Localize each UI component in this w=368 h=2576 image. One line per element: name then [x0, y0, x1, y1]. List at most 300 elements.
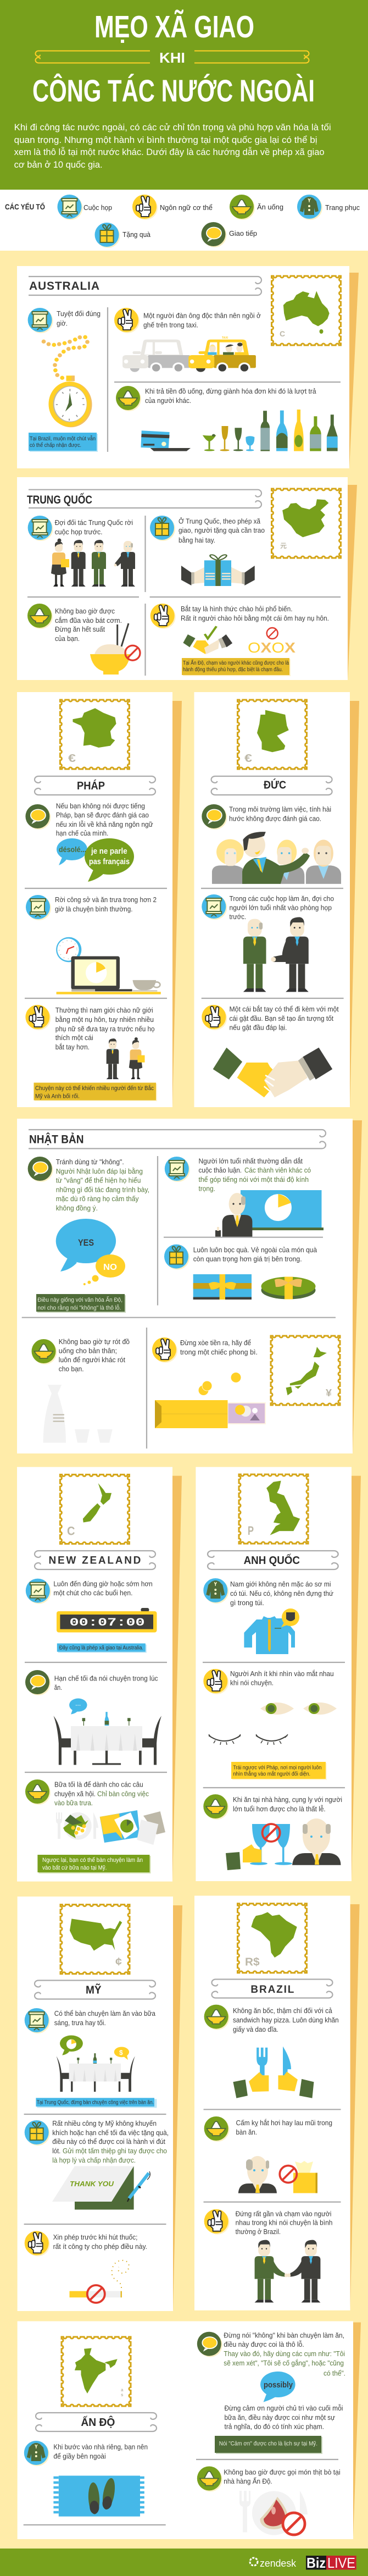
heading: Australia: [29, 277, 261, 295]
illustration: thank-you card and pen: THANK YOU: [70, 2180, 114, 2188]
legend label: communication: Giao tiếp: [229, 229, 257, 237]
tip text: Thường thì nam giới chào nữ giới: [55, 1007, 153, 1014]
illustration: YES and NO bubbles: [56, 1219, 125, 1285]
heading: India: [36, 2413, 157, 2431]
tip text: rất ít công ty cho phép điều này.: [53, 2243, 147, 2251]
illustration: wrapped gifts: [193, 1274, 315, 1300]
logo: BizLIVE: LIVE: [327, 2555, 355, 2571]
illustration: possibly bubble: [260, 2372, 295, 2402]
title line 1: MẸO XÃ GIAO: [94, 9, 254, 45]
tip text: [233, 1796, 342, 1813]
stamp: Australia map: [271, 276, 341, 345]
tip: gifts and cards: [25, 2120, 169, 2210]
tip: eye contact: [203, 1669, 337, 1780]
logo: BizLIVE: [306, 2555, 356, 2571]
tip text: người lớn tuổi nhất vào phòng họp: [230, 904, 332, 912]
tip text: Khi bước vào nhà riêng, bạn nên: [53, 2444, 148, 2451]
illustration: hands with fork and knife: [233, 2047, 314, 2098]
tip: pouring drinks: [32, 1338, 130, 1442]
illustration: cigarette: [69, 2260, 129, 2303]
icon: clothing: [297, 195, 322, 220]
tip: greeting: [150, 604, 329, 676]
legend label: gift: Tặng quà: [122, 230, 151, 239]
heading: New Zealand: NEW ZEALAND: [48, 1555, 141, 1567]
callout: North America note: Chuyện này có thể khiến nhiều người đến từ Bắc: [35, 1085, 154, 1092]
panel: France: [17, 692, 182, 1107]
tip text: thường ở Brazil.: [236, 2228, 281, 2236]
tip: wrap gifts: [164, 1245, 317, 1300]
tip text: thích một cái: [55, 1034, 93, 1042]
tip text: [56, 802, 153, 837]
tip: wait for partners: [28, 516, 135, 587]
tip text: giao, người tặng quà cần trao: [179, 527, 265, 534]
tip text: Gửi một tấm thiệp ghi tay được cho: [63, 2147, 167, 2155]
heading: Japan: [29, 1130, 326, 1148]
tip text: Không bao giờ tự rót đồ: [59, 1338, 130, 1346]
tip text: phụ nữ sẽ đưa tay ra trước nếu họ: [55, 1025, 155, 1033]
tip text: Đợi đối tác Trung Quốc rời: [55, 519, 133, 527]
footer: [0, 2549, 368, 2576]
tip text: [145, 388, 316, 405]
tip text: Hạn chế tối đa nói chuyện trong lúc: [54, 1674, 158, 1682]
tip text: Khi ăn tại nhà hàng, cụng ly với người: [233, 1796, 342, 1804]
tip text: [54, 1674, 158, 1691]
tip: long lunches: [26, 895, 161, 994]
stamp: India map: [62, 2337, 131, 2406]
legend label: meeting: Cuộc họp: [83, 203, 112, 212]
illustration: gray car and taxi: [122, 340, 256, 372]
tip text: [199, 1157, 311, 1193]
tip text: Một người đàn ông độc thân nên ngồi ở: [143, 312, 261, 320]
tip text: từ "vâng" để thể hiện họ hiểu: [56, 1176, 141, 1184]
tip text: Luôn đến đúng giờ hoặc sớm hơn: [53, 1580, 153, 1588]
tip text: Đừng ăn hết suất: [55, 626, 105, 633]
tip text: Tuyệt đối đúng: [57, 310, 101, 318]
illustration: older man and tissue box: [238, 2156, 317, 2193]
tip: dinner is for social talk: [25, 1779, 165, 1873]
illustration: digital timer: [57, 1608, 157, 1633]
stamp: France map: [60, 700, 129, 769]
tip text: giấy và dao dĩa.: [233, 2026, 278, 2033]
illustration: clock, laptop and coffee: [56, 937, 161, 994]
callout: USA thank-you note: Nói "Cảm ơn" được cho là lịch sự tại Mỹ.: [219, 2441, 317, 2447]
tip: taxi seating: [114, 308, 261, 372]
illustration: bowl with chopsticks: [90, 623, 140, 675]
panel: Germany: [194, 692, 359, 1107]
tip: ask before smoking: [25, 2231, 147, 2303]
tip text: Cấm kỵ hắt hơi hay lau mũi trong: [236, 2119, 332, 2127]
callout: Australia note: [57, 1644, 147, 1652]
tip text: chuyện xã hội.: [54, 1790, 96, 1798]
tip: eldest leads discussion: [165, 1157, 324, 1237]
tip text: [230, 1005, 339, 1031]
illustration: two men shaking hands: [255, 2240, 320, 2303]
panel: New Zealand: [17, 1467, 182, 1882]
tip text: ghế trên trong taxi.: [143, 322, 198, 329]
stamp: Japan map: ¥: [326, 1387, 332, 1398]
callout: China note: [36, 2098, 157, 2108]
tip: be on time: [26, 1579, 157, 1652]
tip text: bằng hai tay.: [179, 536, 215, 544]
icon: communication: [201, 222, 226, 247]
tip text: [57, 310, 101, 328]
heading: Brazil: [212, 1979, 333, 1998]
heading: USA: [35, 1980, 155, 1999]
panel: Brazil: [194, 1895, 360, 2310]
illustration: handshake and check: [183, 626, 232, 654]
tip text: Chỉ bàn công việc: [97, 1790, 149, 1798]
illustration: envelope, banknote and coins: [155, 1373, 265, 1428]
stamp: Brazil map: [237, 1904, 306, 1973]
tip text: [230, 895, 334, 921]
tip: shoes off: [24, 2441, 148, 2517]
callout: Brazil note: [29, 433, 98, 452]
tip text: [230, 1580, 333, 1607]
tip text: có thể".: [324, 2369, 345, 2377]
heading: USA: MỸ: [86, 1984, 102, 1997]
tip text: lớn tuổi hơn được cho là thất lễ.: [233, 1805, 326, 1813]
illustration: YES and NO bubbles: YES: [78, 1237, 94, 1248]
tip text: [54, 2010, 155, 2027]
panel: USA: [18, 1897, 182, 2311]
tip text: nếu gật đầu đáp lại.: [230, 1024, 287, 1031]
stamp: Germany map: [237, 700, 306, 769]
tip text: cái gật đầu. Bạn sẽ tạo ấn tượng tốt: [230, 1015, 333, 1022]
tip text: mặc dù rõ ràng họ cảm thấy: [56, 1195, 139, 1203]
tip text: [236, 2119, 332, 2136]
tip: chopsticks in rice: [27, 604, 140, 675]
illustration: French speech bubbles: pas français: [89, 857, 130, 866]
tip text: [53, 1580, 153, 1597]
tip text: [55, 896, 157, 913]
callout: USA thank-you note: [215, 2436, 322, 2454]
ornamental lines: [35, 51, 309, 63]
tip text: gì trong túi.: [230, 1599, 264, 1607]
callout: North America note: Mỹ và Anh bối rối.: [35, 1093, 80, 1100]
tip: paying for drinks: [116, 386, 338, 451]
tip text: có túi. Nếu có, không nên đựng thứ: [230, 1590, 333, 1597]
illustration: French speech bubbles: désolé...: [59, 845, 86, 854]
tip text: bắt tay hơn.: [55, 1043, 90, 1051]
tip text: hạn chế của mình.: [56, 830, 108, 837]
legend label: food: Ăn uống: [257, 203, 283, 211]
tip text: Tránh dùng từ "không".: [56, 1158, 124, 1166]
tip text: nhau trong khi nói chuyện là bình: [236, 2219, 333, 2226]
stamp: Brazil map: R$: [245, 1956, 260, 1969]
stamp: France map: €: [68, 753, 76, 765]
illustration: business dinner: [57, 2035, 135, 2092]
tip: limit dinner talk: [25, 1670, 161, 1765]
tip: eldest enters first: [202, 894, 334, 992]
stamp: UK map: [239, 1474, 308, 1544]
intro paragraph: xem là thô lỗ tại một nước khác. Dưới đây là các hướng dẫn về phép xã giao: [14, 147, 325, 157]
tip text: [59, 1338, 130, 1373]
tip text: Bắt tay là hình thức chào hỏi phổ biến.: [181, 605, 292, 613]
heading: India: ẤN ĐỘ: [81, 2415, 115, 2429]
tip text: [55, 1007, 155, 1051]
tip: no eating with hands: [204, 2005, 339, 2098]
legend label: body language: Ngôn ngữ cơ thể: [160, 203, 213, 212]
tip text: Người Nhật luôn đáp lại bằng: [56, 1167, 143, 1175]
panel: United Kingdom: [196, 1467, 361, 1881]
tip text: giờ là chuyện bình thường.: [55, 905, 133, 913]
tip text: [224, 2332, 345, 2377]
stamp: USA map: [60, 1905, 130, 1974]
panel: Australia: [17, 266, 359, 468]
tip text: Rất nhiều công ty Mỹ không khuyến: [52, 2120, 157, 2127]
heading: France: PHÁP: [77, 780, 105, 792]
illustration: steak on plate: [239, 2491, 308, 2536]
tip text: giờ.: [57, 320, 68, 328]
stamp: UK map: P: [248, 1524, 254, 1538]
callout: India no note: Điều này giống với văn hóa Ấn Độ,: [37, 1296, 122, 1303]
tip text: nếu xin lỗi về khả năng ngôn ngữ: [56, 820, 153, 828]
illustration: French speech bubbles: je ne parle: [91, 847, 127, 856]
stamp: USA map: ¢: [115, 1956, 122, 1968]
tip text: [179, 517, 265, 544]
icon: pocket watch: [42, 335, 92, 427]
tip text: sandwich hay pizza. Luôn dùng khăn: [233, 2016, 339, 2024]
illustration: man and woman: [107, 1037, 145, 1079]
callout: Brazil note: Tại Brazil, muộn một chút vẫn: [30, 435, 96, 442]
tip text: Một cái bắt tay có thể đi kèm với một: [230, 1005, 339, 1013]
callout: Australia note: Đây cũng là phép xã giao tại Australia.: [59, 1645, 143, 1651]
illustration: salad and documents: [56, 1810, 165, 1845]
tip: apologize for language: [25, 802, 153, 882]
heading: UK: [208, 1551, 338, 1569]
tip text: khi nói chuyện.: [230, 1679, 274, 1687]
tip: greeting with kiss: [25, 1005, 157, 1101]
tip: handshake and nod: [202, 1005, 339, 1097]
tip text: Đừng nói "không" khi bàn chuyện làm ăn,: [224, 2332, 344, 2340]
panel: Japan: [17, 1119, 362, 1453]
tip text: là hợp lý và chấp nhận được.: [52, 2157, 136, 2164]
tip text: [230, 1670, 334, 1687]
tip text: Xin phép trước khi hút thuốc;: [53, 2234, 137, 2241]
icon: prohibited sign: [267, 628, 278, 639]
tip: don't thank host: [224, 2404, 343, 2431]
tip text: Đừng xòe tiền ra, hãy để: [180, 1339, 251, 1347]
callout: India no note: [36, 1294, 126, 1313]
tip: no nose blowing: [204, 2116, 332, 2193]
logo: BizLIVE: Biz: [306, 2555, 326, 2571]
tip text: Thay vào đó, hãy dùng các cụm như: "Tôi: [224, 2350, 345, 2358]
tip text: một chút cho các buổi hẹn.: [53, 1589, 133, 1597]
illustration: French speech bubbles: [57, 838, 134, 882]
tip: don't thank host: Đừng cảm ơn người chủ trì vào cuối mỗi: [224, 2404, 343, 2412]
tip text: sẽ xem xét", "Tôi sẽ cố gắng", hoặc "cũng: [224, 2359, 344, 2367]
tip text: [53, 2234, 147, 2251]
stamp: China map: 元: [280, 542, 287, 550]
tip text: Đứng rất gần và chạm vào người: [236, 2210, 331, 2218]
tip text: Nếu bạn không nói được tiếng: [56, 802, 145, 810]
legend title: CÁC YẾU TỐ: [5, 202, 45, 211]
callout: India no note: nơi cho rằng nói "không" là thô lỗ.: [37, 1304, 121, 1311]
legend panel: [0, 190, 368, 251]
callout: India touching note: [182, 658, 291, 676]
callout: China note: Tại Trung Quốc, đừng bàn chuyện công việc trên bàn ăn.: [37, 2099, 154, 2105]
callout: India touching note: hành động thiếu phù hợp, đặc biệt là chạm đầu.: [183, 666, 283, 673]
tip text: [180, 1339, 258, 1356]
illustration: eyes: [209, 1702, 337, 1745]
tip text: khích hoặc hạn chế tối đa việc tặng quà,: [52, 2129, 169, 2137]
tip text: Luôn luôn bọc quà. Vẻ ngoài của món quà: [193, 1246, 317, 1254]
tip: don't thank host: trả nghĩa, do đó có tính xúc phạm.: [224, 2423, 324, 2431]
taxi sign: TAXI: [222, 336, 228, 340]
intro paragraph: quan trọng. Nhưng một hành vi bình thường tại một quốc gia lại có thể bị: [14, 135, 317, 145]
tip text: trong một chiếc phong bì.: [180, 1348, 258, 1356]
tip text: cho bạn.: [59, 1366, 84, 1373]
tip text: điều này có thể được coi là hành vi đút: [52, 2138, 165, 2146]
tip text: [53, 2444, 148, 2461]
stamp: Australia map: C: [280, 329, 285, 338]
tip text: [224, 2468, 341, 2485]
heading: China: [27, 490, 261, 508]
icon: gift: [94, 223, 120, 248]
tip text: cuộc họp trước.: [55, 528, 103, 536]
tip text: [236, 2210, 333, 2236]
tip text: để giầy bên ngoài: [53, 2453, 106, 2461]
tip text: Nam giới không nên mặc áo sơ mi: [230, 1580, 331, 1588]
heading: New Zealand: [35, 1551, 155, 1569]
stamp: New Zealand map: [60, 1474, 129, 1544]
tip text: [143, 312, 261, 329]
tip text: Người lớn tuổi nhất thường dẫn dắt: [199, 1157, 303, 1165]
heading: Brazil: BRAZIL: [250, 1984, 294, 1995]
tip text: sáng, trưa hay tối.: [54, 2019, 106, 2027]
icon: body language: [132, 195, 158, 220]
heading: Germany: [211, 776, 332, 795]
tip text: Bữa tối là để dành cho các câu: [54, 1781, 143, 1789]
callout: USA note: [37, 1855, 150, 1873]
illustration: large handshake: [213, 1048, 332, 1097]
tip: don't thank host: bữa ăn, điều này được coi như một sự: [224, 2414, 335, 2422]
callout: USA note: Ngược lại, bạn có thể bàn chuyện làm ăn: [42, 1857, 143, 1864]
illustration: digital timer: 00:07:00: [69, 1617, 145, 1629]
heading: France: [35, 776, 155, 795]
intro paragraph: cơ bản ở 10 quốc gia.: [14, 159, 103, 170]
tip text: hước không được đánh giá cao.: [229, 815, 321, 823]
tip text: lót.: [52, 2147, 60, 2155]
illustration: hands holding gift: [181, 555, 255, 586]
illustration: YES and NO bubbles: NO: [103, 1263, 117, 1272]
heading: Japan: NHẬT BẢN: [29, 1132, 83, 1146]
currency letter: s: [121, 2392, 124, 2397]
illustration: thank-you card and pen: [52, 2166, 150, 2210]
illustration: credit card and drinks: [141, 410, 338, 451]
tip text: luôn để người khác rót: [59, 1356, 126, 1364]
logo: zendesk: zendesk: [260, 2558, 297, 2569]
tip text: không đồng ý.: [56, 1204, 98, 1212]
tip text: của bạn.: [55, 635, 80, 643]
tip text: uống cho bản thân;: [59, 1347, 117, 1355]
tip text: [55, 519, 133, 536]
tip text: trước.: [230, 913, 246, 921]
tip text: [56, 1158, 149, 1212]
legend label: clothing: Trang phục: [325, 203, 360, 212]
tip: don't say no: [197, 2332, 345, 2402]
tip text: những gì đối tác đang trình bày,: [56, 1186, 149, 1194]
tip text: Rất ít người chào hỏi bằng một cái ôm hay nụ hôn.: [181, 614, 329, 622]
tip text: Rời công sở và ăn trưa trong hơn 2: [55, 896, 157, 904]
illustration: possibly bubble: possibly: [264, 2380, 293, 2390]
stamp: China map: [271, 489, 341, 558]
tip: clinking glasses: [203, 1794, 342, 1870]
heading: Australia: AUSTRALIA: [29, 280, 99, 292]
illustration: dining table: [53, 1699, 161, 1765]
panel: China: [17, 477, 357, 680]
tip text: ăn.: [54, 1684, 62, 1691]
illustration: unamused colleagues: [212, 832, 341, 884]
tip: no beef: [197, 2466, 341, 2536]
tip text: còn quan trọng hơn giá trị bên trong.: [193, 1256, 302, 1263]
tip text: Không ăn bốc, thậm chí đối với cả: [233, 2007, 332, 2015]
tip text: Người Anh ít khi nhìn vào mắt nhau: [230, 1670, 334, 1678]
icon: meeting: [57, 195, 82, 220]
tip text: điều này được coi là thô lỗ.: [224, 2340, 304, 2348]
tip text: [181, 605, 329, 622]
tip text: Có thể bàn chuyện làm ăn vào bữa: [54, 2010, 155, 2017]
stamp: Germany map: €: [244, 753, 252, 765]
tip text: thể góp tiếng nói với một thái độ kính: [199, 1176, 309, 1184]
stamp: Japan map: [271, 1336, 340, 1405]
tip text: nhà hàng Ấn Độ.: [224, 2477, 272, 2485]
tip: money in envelope: [152, 1337, 265, 1428]
heading: China: TRUNG QUỐC: [27, 493, 92, 506]
tip text: Không bao giờ được gọi món thịt bò tại: [224, 2468, 341, 2476]
tip text: [52, 2120, 169, 2164]
illustration: sake set: [43, 1385, 113, 1442]
tip: punctuality: [28, 308, 101, 452]
tip text: [54, 1781, 149, 1807]
dollar sign: $: [119, 2049, 123, 2057]
callout: France note: Trái ngược với Pháp, nơi mọi người luôn: [233, 1765, 321, 1771]
tip text: cắm đũa vào bát cơm.: [55, 616, 122, 624]
tip: give gifts with two hands: [150, 516, 265, 586]
heading: UK: ANH QUỐC: [244, 1554, 300, 1567]
tip text: Khi trả tiền đồ uống, đừng giành hóa đơn khi đó là lượt trả: [145, 388, 316, 395]
intro paragraph: Khi đi công tác nước ngoài, có các cử chỉ tôn trọng và phù hợp văn hóa là tối: [14, 122, 331, 132]
text: OXOX: OXOX: [248, 639, 296, 656]
header panel: [0, 0, 368, 190]
callout: USA note: vào bất cứ bữa nào tại Mỹ.: [42, 1865, 107, 1871]
illustration: business people: [51, 539, 135, 587]
tip: business at meals: [25, 2008, 157, 2108]
illustration: shirt with pocket: [244, 1608, 299, 1654]
tip: humor: [202, 804, 341, 884]
stamp: New Zealand map: C: [67, 1524, 75, 1538]
tip: shirt pockets: [203, 1578, 333, 1654]
tip text: Trong môi trường làm việc, tính hài: [229, 806, 331, 814]
stamp: India map: a: [121, 2387, 124, 2392]
tip text: vào bữa trưa.: [54, 1799, 93, 1807]
intro paragraph: [14, 122, 331, 170]
title word KHI: KHI: [159, 49, 185, 66]
tip text: bàn ăn.: [236, 2129, 257, 2136]
tip text: [229, 806, 331, 823]
tip text: [233, 2007, 339, 2033]
tip text: trọng.: [199, 1185, 215, 1193]
tip: avoid saying no: [28, 1157, 149, 1313]
tip text: [193, 1246, 317, 1263]
callout: France note: [231, 1762, 327, 1780]
tip text: Ở Trung Quốc, theo phép xã: [179, 517, 260, 526]
tip text: bằng một nụ hôn, tuy nhiên nhiều: [55, 1015, 154, 1024]
callout: North America note: [34, 1083, 157, 1101]
illustration: toast with older man: [226, 1818, 341, 1870]
tip text: [55, 607, 122, 643]
tip text: của người khác.: [145, 397, 191, 405]
